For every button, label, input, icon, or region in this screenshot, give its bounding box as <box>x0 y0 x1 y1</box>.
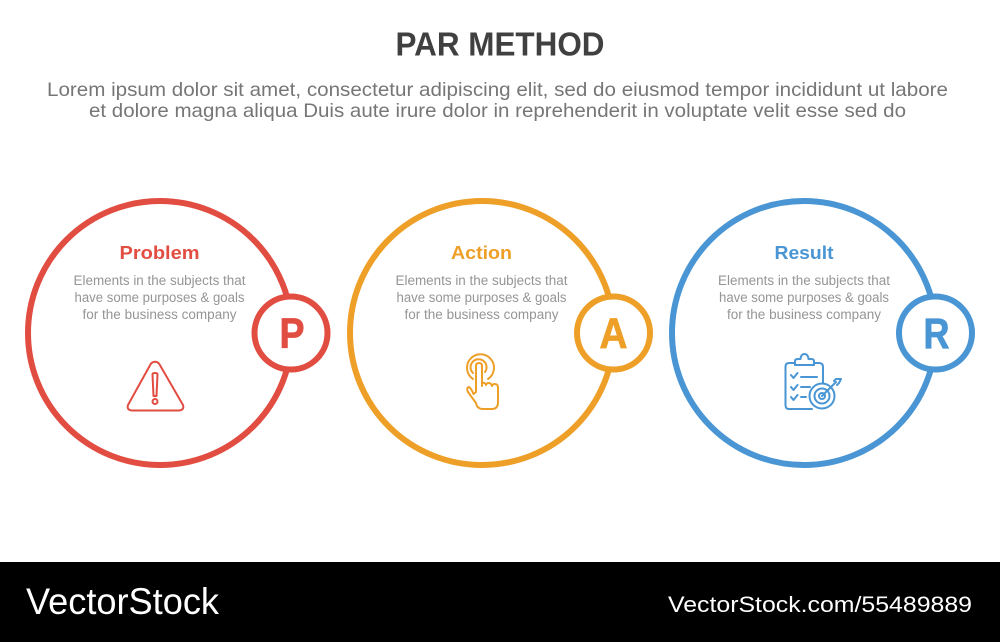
problem heading: Problem <box>120 243 200 263</box>
action description: have some purposes & goals <box>396 290 567 305</box>
action description: Elements in the subjects that <box>396 273 568 288</box>
action description <box>396 273 568 322</box>
watermark footer band <box>0 562 1000 642</box>
problem large ring <box>28 201 292 465</box>
subtitle text: Lorem ipsum dolor sit amet, consectetur adipiscing elit, sed do eiusmod tempor incididunt ut labore <box>47 79 948 101</box>
result description: have some purposes & goals <box>719 290 889 305</box>
problem description: Elements in the subjects that <box>74 273 246 288</box>
subtitle text <box>47 79 948 122</box>
footer logo: VectorStock <box>26 581 219 622</box>
action description: for the business company <box>404 307 559 322</box>
problem description: have some purposes & goals <box>74 290 245 305</box>
footer url: VectorStock.com/55489889 <box>668 592 972 617</box>
result description <box>718 273 890 322</box>
result large ring <box>672 201 936 465</box>
panel: result <box>672 201 972 465</box>
result description: for the business company <box>727 307 881 322</box>
problem description <box>74 273 246 322</box>
action heading: Action <box>451 243 512 263</box>
problem description: for the business company <box>82 307 237 322</box>
problem badge <box>254 296 328 370</box>
result letter: R <box>924 310 950 358</box>
icon: tapping hand <box>467 354 498 409</box>
action large ring <box>350 201 614 465</box>
title: PAR METHOD <box>396 26 604 62</box>
problem letter: P <box>280 310 304 358</box>
icon: warning triangle <box>128 362 183 410</box>
action letter: A <box>600 310 628 358</box>
result description: Elements in the subjects that <box>718 273 890 288</box>
subtitle text: et dolore magna aliqua Duis aute irure dolor in reprehenderit in voluptate velit esse sed do <box>89 100 906 122</box>
result heading: Result <box>774 243 834 263</box>
panel: problem <box>28 201 328 465</box>
result badge <box>899 296 972 370</box>
panel: action <box>350 201 650 465</box>
icon: clipboard with target <box>786 354 841 409</box>
action badge <box>577 296 650 370</box>
